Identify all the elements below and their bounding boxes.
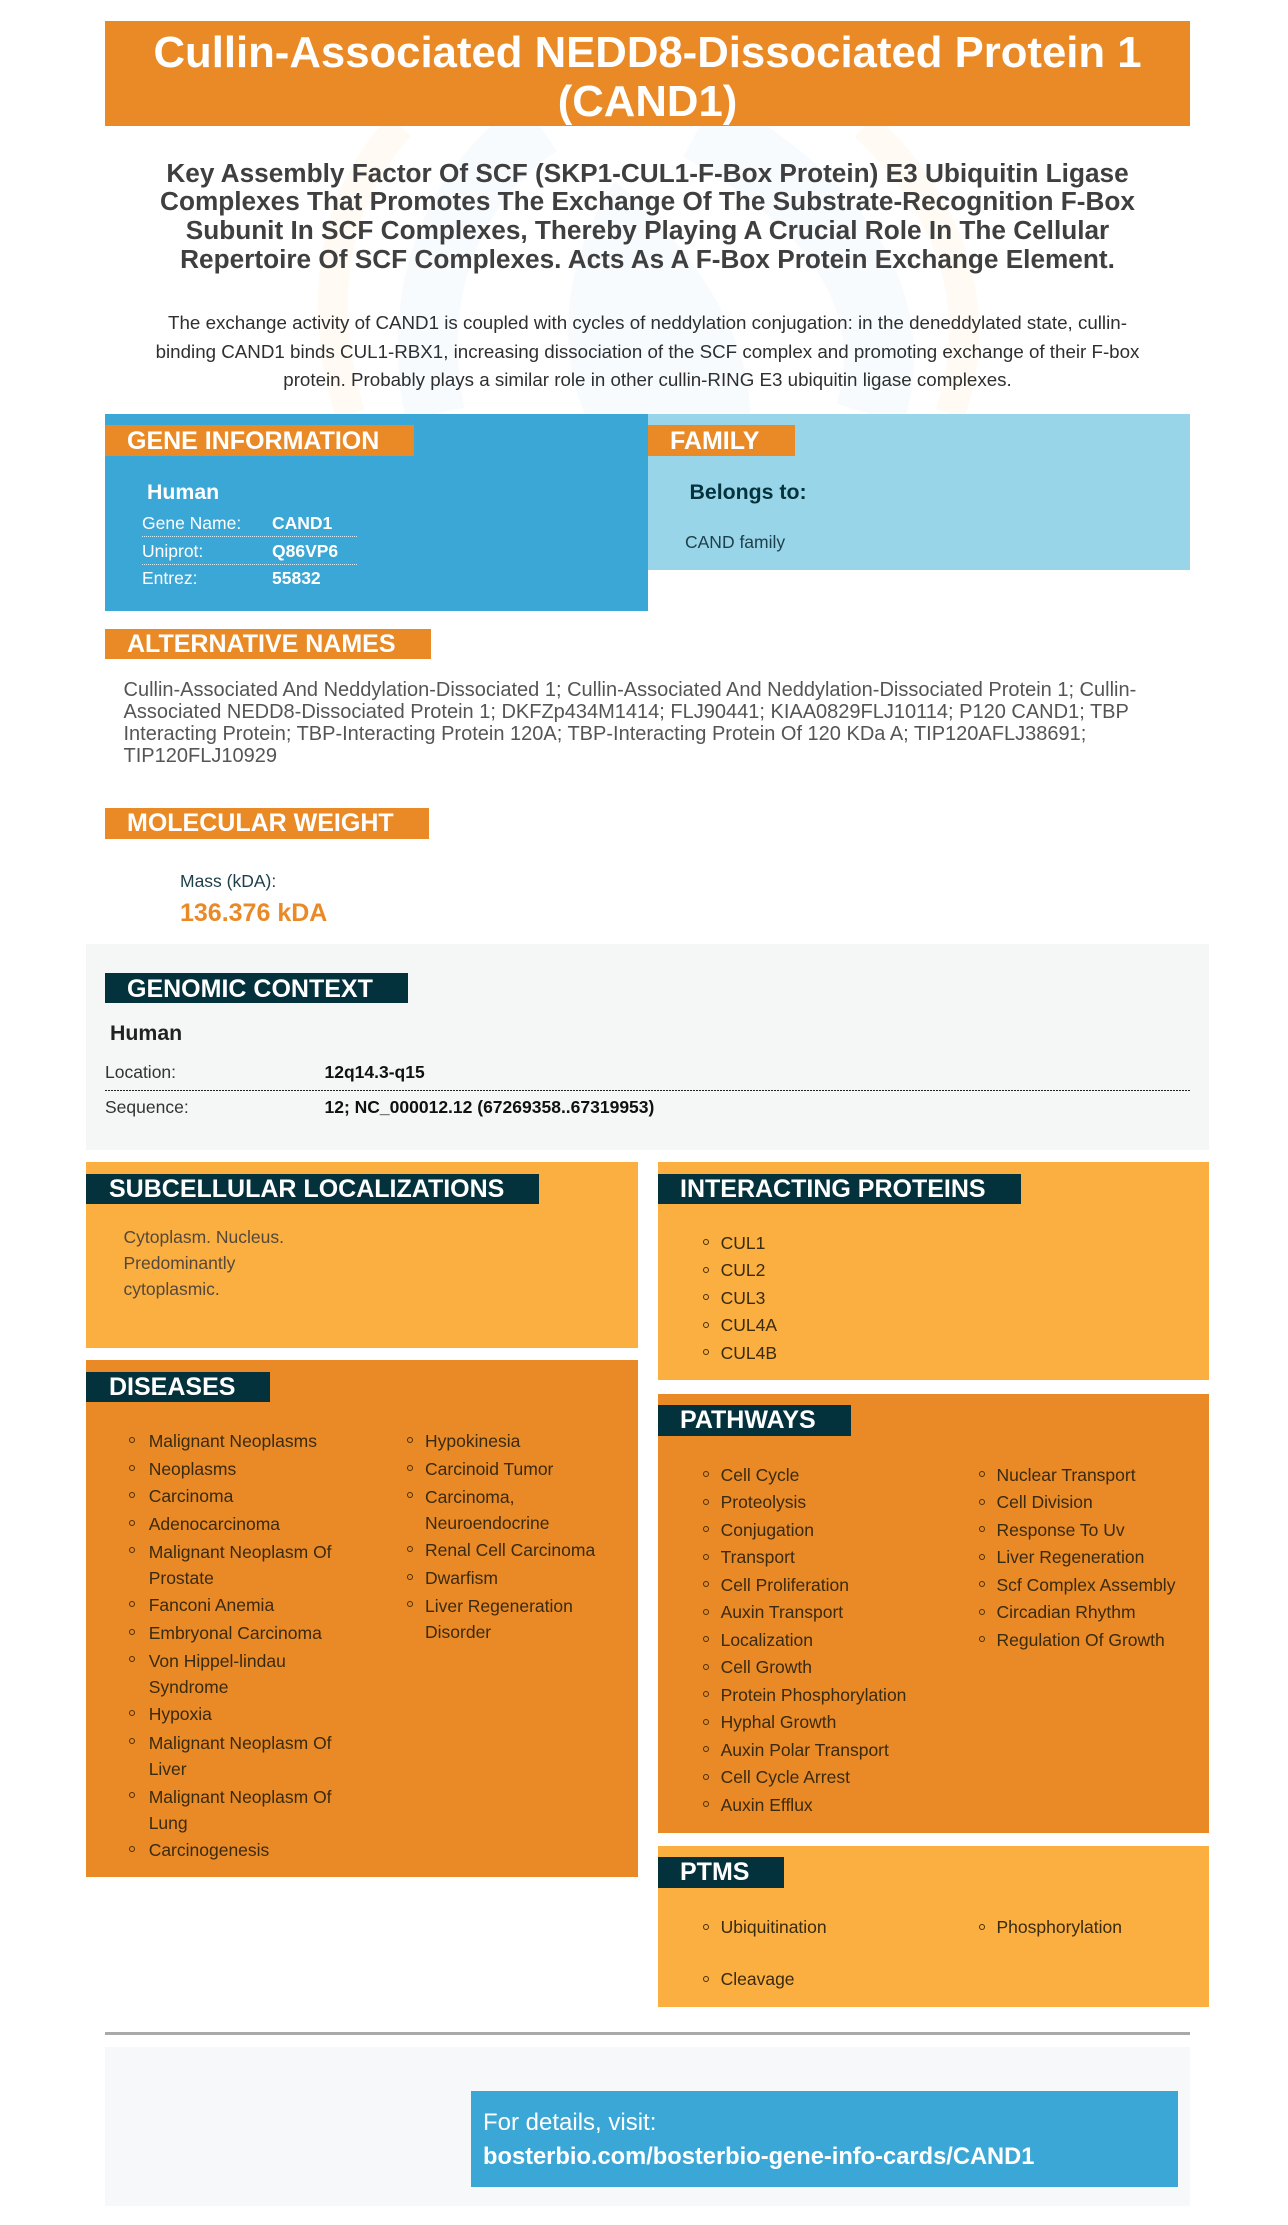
gene name row: Gene Name: bbox=[142, 513, 241, 533]
panel: diseases bbox=[86, 1360, 638, 1877]
panel: genomic context: 12; NC_000012.12 (67269358..67319953) bbox=[324, 1097, 654, 1117]
pathway list column 2: Scf Complex Assembly bbox=[996, 1574, 1175, 1594]
disease list column 1: Hypoxia bbox=[149, 1704, 212, 1724]
pathway list column 2: Cell Division bbox=[996, 1492, 1093, 1512]
mass value: 136.376 kDA bbox=[180, 899, 327, 927]
protein list bbox=[703, 1232, 777, 1362]
pathway list column 2: Liver Regeneration bbox=[996, 1547, 1144, 1567]
disease list column 2: Dwarfism bbox=[425, 1568, 498, 1588]
panel: genomic context: 12q14.3-q15 bbox=[324, 1062, 425, 1082]
location row: Location: bbox=[105, 1062, 176, 1082]
protein list: CUL3 bbox=[721, 1288, 765, 1308]
disease list column 1: Prostate bbox=[149, 1568, 214, 1588]
heading: genomic context: GENOMIC CONTEXT bbox=[127, 974, 373, 1002]
disease list column 1 bbox=[129, 1431, 332, 1860]
heading: pathways: PATHWAYS bbox=[680, 1406, 816, 1434]
panel: interacting proteins bbox=[658, 1162, 1209, 1380]
description paragraph bbox=[156, 312, 1140, 390]
gene name row: CAND1 bbox=[272, 513, 332, 533]
alternative names text bbox=[124, 679, 1136, 767]
description paragraph: The exchange activity of CAND1 is coupled with cycles of neddylation conjugation: in the deneddylated state, cullin- bbox=[168, 312, 1127, 333]
subtitle: Complexes That Promotes The Exchange Of The Substrate-Recognition F-Box bbox=[160, 186, 1135, 216]
background watermark logo bbox=[318, 126, 979, 414]
pathway list column 1: Transport bbox=[721, 1547, 795, 1567]
panel: pathways bbox=[658, 1394, 1209, 1833]
disease list column 1: Embryonal Carcinoma bbox=[149, 1622, 322, 1642]
location row bbox=[105, 1062, 425, 1082]
pathway list column 1 bbox=[703, 1464, 906, 1814]
description paragraph: protein. Probably plays a similar role in other cullin-RING E3 ubiquitin ligase complexes. bbox=[283, 369, 1012, 390]
dotted divider bbox=[105, 1090, 1190, 1091]
protein list: CUL4B bbox=[721, 1342, 777, 1362]
entrez row: 55832 bbox=[272, 568, 321, 588]
pathway list column 2: Circadian Rhythm bbox=[996, 1602, 1136, 1622]
callout label: For details, visit: bbox=[483, 2109, 656, 2136]
disease list column 1: Liver bbox=[149, 1758, 187, 1778]
subtitle: Key Assembly Factor Of SCF (SKP1-CUL1-F-Box Protein) E3 Ubiquitin Ligase bbox=[166, 158, 1129, 188]
title banner: Cullin-Associated NEDD8-Dissociated Protein 1 bbox=[153, 28, 1142, 77]
subtitle bbox=[160, 158, 1135, 274]
alternative names text: Associated NEDD8-Dissociated Protein 1; DKFZp434M1414; FLJ90441; KIAA0829FLJ10114; P120 CAND1; TBP bbox=[124, 701, 1129, 723]
gene name row bbox=[142, 511, 357, 537]
pathway list column 1: Cell Cycle bbox=[721, 1464, 799, 1484]
pathway list column 1: Proteolysis bbox=[721, 1492, 806, 1512]
pathway list column 2 bbox=[979, 1464, 1176, 1650]
disease list column 1: Adenocarcinoma bbox=[149, 1514, 280, 1534]
species label: Human bbox=[110, 1021, 182, 1045]
title banner bbox=[105, 21, 1190, 126]
heading: alternative names: ALTERNATIVE NAMES bbox=[127, 630, 396, 658]
disease list column 1: Malignant Neoplasm Of bbox=[149, 1786, 332, 1806]
disease list column 2: Renal Cell Carcinoma bbox=[425, 1540, 595, 1560]
belongs to label: Belongs to: bbox=[690, 480, 807, 504]
localization text: Cytoplasm. Nucleus. bbox=[124, 1227, 284, 1247]
footer divider bbox=[105, 2032, 1190, 2035]
heading: gene information: GENE INFORMATION bbox=[127, 427, 379, 455]
ptm list: Ubiquitination bbox=[721, 1917, 827, 1937]
disease list column 1: Von Hippel-lindau bbox=[149, 1651, 286, 1671]
pathway list column 1: Cell Growth bbox=[721, 1657, 812, 1677]
panel: subcellular localizations bbox=[86, 1162, 638, 1348]
entrez row: Entrez: bbox=[142, 568, 197, 588]
disease list column 1: Carcinogenesis bbox=[149, 1840, 269, 1860]
localization text: cytoplasmic. bbox=[124, 1279, 220, 1299]
description paragraph: binding CAND1 binds CUL1-RBX1, increasing dissociation of the SCF complex and promoting exchange of their F-box bbox=[156, 340, 1139, 362]
sequence row bbox=[105, 1097, 654, 1117]
uniprot row bbox=[142, 538, 357, 564]
pathway list column 1: Localization bbox=[721, 1630, 813, 1650]
pathway list column 1: Cell Cycle Arrest bbox=[721, 1767, 850, 1787]
uniprot row: Uniprot: bbox=[142, 540, 203, 560]
alternative names text: Interacting Protein; TBP-Interacting Protein 120A; TBP-Interacting Protein Of 120 KDa A; TIP120AFLJ38691; bbox=[124, 723, 1086, 745]
alternative names text: TIP120FLJ10929 bbox=[124, 745, 277, 767]
ptm list: Cleavage bbox=[721, 1969, 795, 1989]
heading: family bbox=[648, 425, 795, 456]
mass label: Mass (kDA): bbox=[180, 871, 276, 891]
panel: genomic context bbox=[86, 944, 1209, 1150]
pathway list column 2: Regulation Of Growth bbox=[996, 1630, 1165, 1650]
disease list column 1: Neoplasms bbox=[149, 1458, 236, 1478]
panel: footer bbox=[105, 2047, 1190, 2206]
heading: diseases bbox=[86, 1372, 270, 1402]
localization text bbox=[124, 1227, 284, 1299]
pathway list column 1: Auxin Efflux bbox=[721, 1794, 813, 1814]
disease list column 2: Carcinoid Tumor bbox=[425, 1458, 553, 1478]
species label: Human bbox=[147, 480, 219, 504]
panel: ptms bbox=[658, 1846, 1209, 2007]
title banner: (CAND1) bbox=[558, 77, 737, 126]
disease list column 2: Carcinoma, bbox=[425, 1487, 514, 1507]
pathway list column 1: Auxin Polar Transport bbox=[721, 1740, 889, 1760]
heading: ptms: PTMS bbox=[680, 1858, 749, 1886]
localization text: Predominantly bbox=[124, 1253, 235, 1273]
heading: pathways bbox=[658, 1405, 851, 1436]
pathway list column 2: Nuclear Transport bbox=[996, 1464, 1136, 1484]
pathway list column 1: Cell Proliferation bbox=[721, 1574, 849, 1594]
callout: details link bbox=[471, 2091, 1178, 2187]
sequence row: Sequence: bbox=[105, 1097, 189, 1117]
ptm list: Phosphorylation bbox=[996, 1917, 1122, 1937]
protein list: CUL2 bbox=[721, 1260, 765, 1280]
disease list column 2: Hypokinesia bbox=[425, 1431, 520, 1451]
heading: subcellular localizations: SUBCELLULAR LOCALIZATIONS bbox=[109, 1175, 504, 1203]
disease list column 2: Disorder bbox=[425, 1622, 491, 1642]
ptm list bbox=[703, 1917, 1122, 1989]
disease list column 1: Malignant Neoplasms bbox=[149, 1431, 317, 1451]
disease list column 2: Liver Regeneration bbox=[425, 1596, 573, 1616]
heading: diseases: DISEASES bbox=[109, 1373, 235, 1401]
disease list column 1: Fanconi Anemia bbox=[149, 1595, 274, 1615]
disease list column 1: Malignant Neoplasm Of bbox=[149, 1542, 332, 1562]
pathway list column 2: Response To Uv bbox=[996, 1520, 1125, 1540]
panel: family bbox=[648, 414, 1190, 570]
pathway list column 1: Auxin Transport bbox=[721, 1602, 843, 1622]
protein list: CUL4A bbox=[721, 1315, 777, 1335]
uniprot row: Q86VP6 bbox=[272, 540, 338, 560]
pathway list column 1: Hyphal Growth bbox=[721, 1712, 836, 1732]
heading: family: FAMILY bbox=[670, 427, 759, 455]
disease list column 1: Carcinoma bbox=[149, 1486, 233, 1506]
pathway list column 1: Conjugation bbox=[721, 1520, 814, 1540]
heading: molecular weight: MOLECULAR WEIGHT bbox=[127, 809, 394, 837]
disease list column 1: Malignant Neoplasm Of bbox=[149, 1732, 332, 1752]
callout url: bosterbio.com/bosterbio-gene-info-cards/CAND1 bbox=[483, 2144, 1034, 2170]
entrez row bbox=[142, 568, 321, 588]
disease list column 2: Neuroendocrine bbox=[425, 1513, 550, 1533]
heading: interacting proteins: INTERACTING PROTEINS bbox=[680, 1175, 986, 1203]
disease list column 1: Lung bbox=[149, 1812, 188, 1832]
heading: ptms bbox=[658, 1857, 784, 1888]
panel: gene information bbox=[105, 414, 648, 611]
disease list column 2 bbox=[407, 1431, 596, 1642]
alternative names text: Cullin-Associated And Neddylation-Dissociated 1; Cullin-Associated And Neddylation-Dissociated Protein 1; Cullin- bbox=[124, 679, 1136, 701]
subtitle: Repertoire Of SCF Complexes. Acts As A F-Box Protein Exchange Element. bbox=[180, 244, 1115, 274]
family value: CAND family bbox=[685, 532, 785, 552]
protein list: CUL1 bbox=[721, 1232, 765, 1252]
subtitle: Subunit In SCF Complexes, Thereby Playing A Crucial Role In The Cellular bbox=[186, 215, 1109, 245]
pathway list column 1: Protein Phosphorylation bbox=[721, 1684, 906, 1704]
disease list column 1: Syndrome bbox=[149, 1677, 228, 1697]
